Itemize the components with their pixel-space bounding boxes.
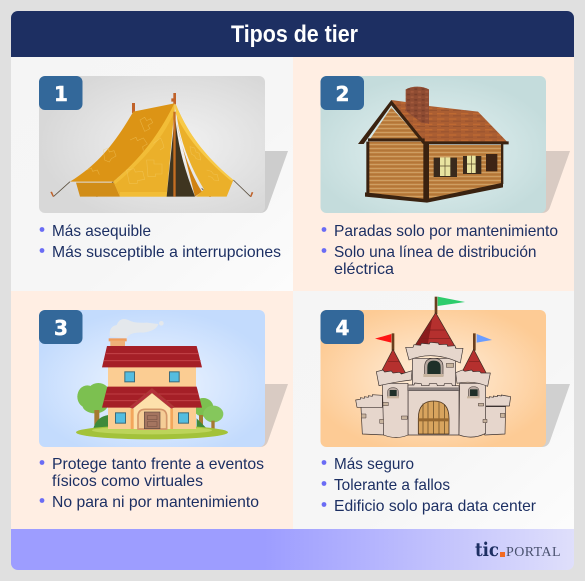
title: Tipos de tier	[231, 21, 358, 48]
bullet list 2: eléctrica	[334, 261, 394, 278]
icon: two-storey house	[76, 319, 228, 439]
bullet list 3: Protege tanto frente a eventos	[52, 456, 264, 473]
panel 2 background	[293, 57, 574, 291]
panel: tier 1	[39, 76, 288, 261]
bullet list 1: Más asequible	[52, 223, 151, 240]
panel: tier 4	[320, 297, 570, 515]
bullet list 3: físicos como virtuales	[52, 473, 203, 490]
badge 3: 3	[54, 316, 68, 340]
image card 1	[39, 76, 265, 213]
panel 4 background	[293, 291, 574, 529]
bullet list 2	[322, 223, 558, 278]
panel 1 background	[11, 57, 293, 291]
logo: tic.PORTAL	[475, 539, 560, 561]
image card 2	[320, 76, 546, 213]
badge 1	[39, 76, 82, 110]
badge 4	[320, 310, 364, 344]
bullet list 2: Solo una línea de distribución	[334, 244, 536, 261]
badge 4: 4	[336, 316, 349, 340]
bullet list 1	[40, 223, 281, 261]
image card 3	[39, 310, 265, 447]
icon: castle	[356, 297, 511, 437]
image shadow 3	[250, 384, 288, 447]
logo: tic.PORTAL: tic	[475, 539, 499, 561]
bullet list 4: Tolerante a fallos	[334, 477, 450, 494]
image shadow 4	[535, 384, 570, 447]
badge 2: 2	[336, 82, 349, 106]
badge 2	[320, 76, 364, 110]
bullet list 4: Edificio solo para data center	[334, 498, 536, 515]
panel: tier 3	[39, 310, 288, 511]
panel: tier 2	[320, 76, 570, 278]
bullet list 4	[322, 456, 536, 515]
footer bar	[11, 529, 574, 570]
panel 3 background	[11, 291, 293, 529]
bullet list 3: No para ni por mantenimiento	[52, 494, 259, 511]
bullet list 1: Más susceptible a interrupciones	[52, 244, 281, 261]
badge 3	[39, 310, 82, 344]
icon: wooden house	[358, 87, 509, 203]
badge 1: 1	[54, 82, 68, 106]
bullet list 3	[40, 456, 264, 511]
logo: tic.PORTAL: PORTAL	[506, 545, 560, 560]
icon: tent	[50, 93, 253, 197]
image shadow 1	[250, 151, 288, 213]
image shadow 2	[535, 151, 570, 213]
bullet list 4: Más seguro	[334, 456, 414, 473]
image card 4	[320, 310, 546, 447]
header bar	[11, 11, 574, 57]
bullet list 2: Paradas solo por mantenimiento	[334, 223, 558, 240]
